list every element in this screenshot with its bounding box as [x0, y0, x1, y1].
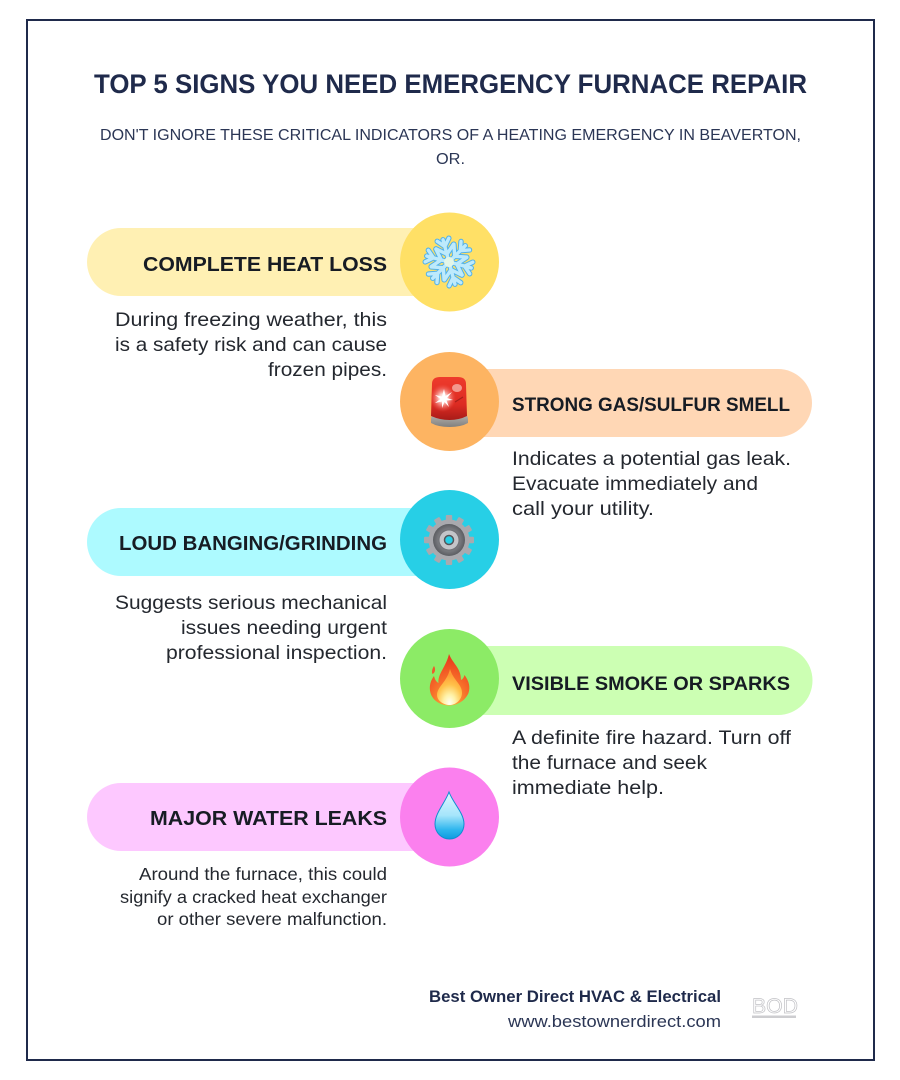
heading: strong gas smell: STRONG GAS/SULFUR SMELL — [512, 395, 790, 416]
sign 4: visible smoke or sparks — [400, 629, 813, 799]
sign 1: complete heat loss — [87, 212, 499, 381]
subtitle — [100, 127, 801, 168]
description: strong gas smell: Indicates a potential gas leak. — [512, 448, 791, 470]
sign 5: major water leaks — [87, 768, 499, 929]
description: visible smoke or sparks: A definite fire hazard. Turn off — [512, 727, 792, 749]
description: loud banging — [115, 592, 388, 664]
description: visible smoke or sparks: the furnace and seek — [512, 752, 707, 774]
description: complete heat loss: frozen pipes. — [268, 359, 387, 381]
description: complete heat loss: During freezing weather, this — [115, 309, 387, 331]
description: strong gas smell: call your utility. — [512, 498, 654, 520]
sign 2: strong gas smell — [400, 352, 812, 520]
pill: visible smoke or sparks — [450, 646, 813, 715]
circle: visible smoke or sparks — [400, 629, 499, 728]
description: loud banging: professional inspection. — [166, 642, 387, 664]
icon: water drop — [435, 792, 464, 839]
pill: strong gas smell — [450, 369, 812, 437]
footer: company name: Best Owner Direct HVAC & Electrical — [429, 988, 721, 1006]
circle: complete heat loss — [400, 212, 499, 312]
description: major water leaks: or other severe malfunction. — [157, 909, 387, 929]
description: complete heat loss — [115, 309, 387, 381]
description: major water leaks — [120, 864, 387, 929]
pill: complete heat loss — [87, 228, 450, 296]
description: loud banging: issues needing urgent — [181, 617, 388, 639]
description: major water leaks: signify a cracked heat exchanger — [120, 887, 387, 907]
subtitle: DON'T IGNORE THESE CRITICAL INDICATORS OF A HEATING EMERGENCY IN BEAVERTON, — [100, 127, 801, 144]
subtitle: OR. — [436, 151, 465, 168]
circle: strong gas smell — [400, 352, 499, 451]
title: TOP 5 SIGNS YOU NEED EMERGENCY FURNACE REPAIR — [94, 69, 807, 99]
footer: website: www.bestownerdirect.com — [507, 1012, 721, 1031]
pill: loud banging — [87, 508, 450, 576]
circle: loud banging — [400, 490, 499, 589]
icon: siren — [430, 377, 468, 427]
heading: complete heat loss: COMPLETE HEAT LOSS — [143, 253, 387, 276]
description: visible smoke or sparks: immediate help. — [512, 777, 664, 799]
footer: logo: BOD — [752, 995, 798, 1018]
heading: visible smoke or sparks: VISIBLE SMOKE OR SPARKS — [512, 674, 790, 695]
heading: major water leaks: MAJOR WATER LEAKS — [150, 807, 387, 830]
description: major water leaks: Around the furnace, this could — [139, 864, 387, 884]
icon: gear — [424, 515, 474, 565]
description: strong gas smell: Evacuate immediately and — [512, 473, 758, 495]
sign 3: loud banging — [87, 490, 499, 664]
heading: loud banging: LOUD BANGING/GRINDING — [119, 532, 387, 555]
pill: major water leaks — [87, 783, 450, 851]
description: visible smoke or sparks — [512, 727, 792, 799]
description: strong gas smell — [512, 448, 791, 520]
icon: snowflake — [419, 233, 479, 291]
circle: major water leaks — [400, 768, 499, 866]
icon: flame — [430, 654, 469, 706]
description: loud banging: Suggests serious mechanical — [115, 592, 387, 614]
description: complete heat loss: is a safety risk and can cause — [115, 334, 387, 356]
